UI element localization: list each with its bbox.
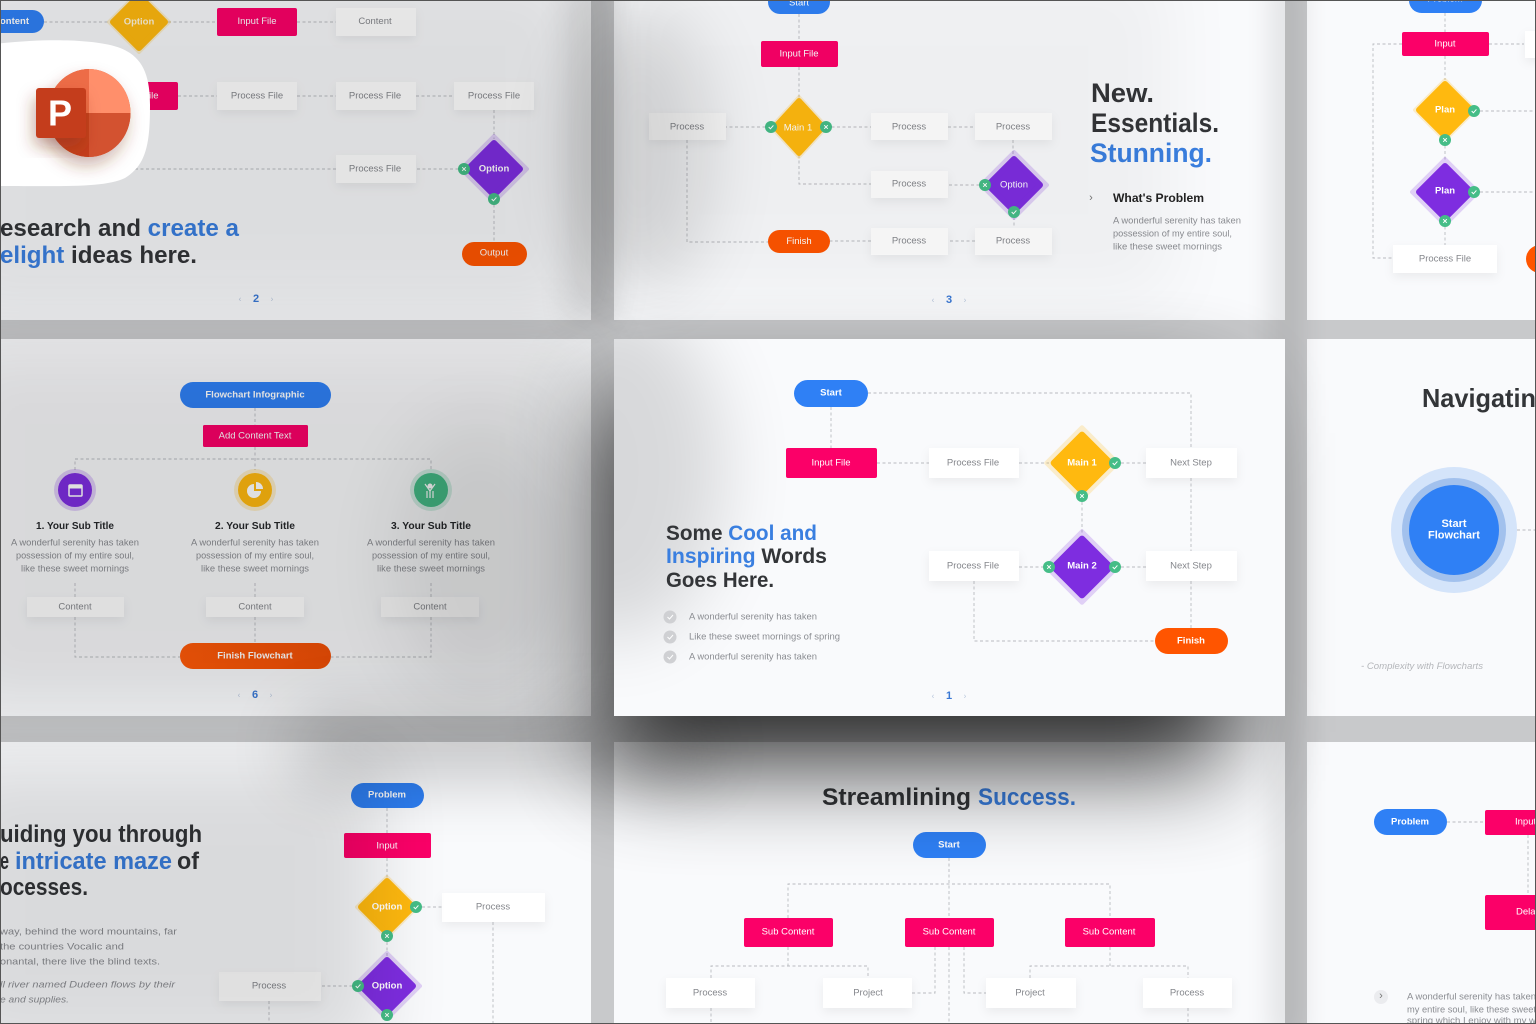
- heading: uiding you through: [0, 821, 202, 848]
- box: project 1: [823, 978, 912, 1008]
- box: sub content 2: [905, 918, 994, 947]
- heading: [666, 522, 827, 592]
- bullet 3: A wonderful serenity has taken: [689, 652, 817, 662]
- slide 6: flowchart infographic: [0, 339, 591, 716]
- box: input file: [217, 8, 297, 36]
- icon: person: [410, 469, 452, 511]
- pill: finish: Finish: [786, 236, 812, 247]
- pill: problem: Problem: [368, 790, 406, 800]
- box: input file: [786, 448, 877, 478]
- heading: New.: [1091, 78, 1154, 108]
- icon: calendar: [54, 469, 96, 511]
- pagination: 1: [946, 690, 952, 702]
- icon: pie chart: [234, 469, 276, 511]
- box: input: Input: [376, 840, 398, 852]
- diamond: plan purple: [1412, 159, 1480, 227]
- box: process e: Process: [996, 236, 1030, 246]
- pill: output: [462, 242, 527, 266]
- box: process file 2: Process File: [349, 90, 401, 102]
- pagination: ‹: [932, 692, 935, 700]
- diamond: main 1: Main 1: [1067, 458, 1097, 468]
- box: input: Input: [1515, 816, 1536, 828]
- diamond: option: Option: [124, 16, 154, 28]
- box: process file top: [929, 448, 1019, 478]
- pagination: ›: [964, 692, 967, 700]
- paragraph: onantal, there live the blind texts.: [0, 956, 160, 968]
- box: process file 2: [336, 82, 416, 110]
- subtitle: 3. Your Sub Title: [391, 520, 471, 532]
- paragraph: [1407, 992, 1536, 1024]
- pill: problem: [351, 783, 424, 808]
- pill: output: Output: [480, 248, 509, 258]
- pagination: [932, 294, 967, 306]
- heading: ocesses.: [0, 874, 88, 901]
- diamond: option yellow: Option: [372, 902, 402, 912]
- paragraph: A wonderful serenity has taken: [1407, 992, 1536, 1002]
- slide 10: problem and delay: [1307, 742, 1536, 1024]
- box: delay: [1485, 895, 1536, 930]
- paragraph: A wonderful serenity has taken: [11, 538, 139, 548]
- box: input file: Input File: [779, 48, 819, 60]
- box: process left: Process: [670, 122, 704, 132]
- paragraph: possession of my entire soul,: [1113, 228, 1232, 240]
- slide 3: new essentials: [614, 0, 1285, 320]
- paragraph: possession of my entire soul,: [196, 550, 314, 562]
- box: input: Input: [1434, 38, 1456, 50]
- diamond: main 1: Main 1: [784, 122, 812, 134]
- paragraph: like these sweet mornings: [21, 564, 129, 574]
- powerpoint badge: [0, 40, 150, 186]
- chevron icon: [1374, 990, 1388, 1004]
- diamond: main 1: [1046, 427, 1121, 502]
- diamond: purple option: [458, 136, 527, 205]
- box: process a: [871, 113, 948, 140]
- heading: [822, 784, 1076, 811]
- box: input file: Input File: [811, 458, 851, 468]
- box: content: [27, 597, 124, 617]
- diamond: main 1: [765, 97, 832, 157]
- box: process d: [871, 228, 948, 255]
- box: sub content 3: Sub Content: [1083, 926, 1136, 938]
- pagination: ‹: [239, 294, 242, 304]
- box: add content text: Add Content Text: [219, 430, 292, 442]
- box: add content text: [203, 425, 308, 447]
- box: process file: [1393, 245, 1497, 273]
- box: process left: [219, 972, 321, 1001]
- column 1: [11, 469, 139, 617]
- box: process left: Process: [252, 980, 286, 992]
- slide 7: navigating: [1307, 339, 1536, 716]
- box: content: Content: [413, 602, 447, 612]
- heading: Goes Here.: [666, 569, 774, 592]
- heading: Streamlining: [822, 784, 971, 811]
- paragraph: [0, 926, 177, 968]
- subheading: What's Problem: [1113, 193, 1204, 205]
- pagination: [239, 293, 274, 305]
- column 2: [191, 469, 319, 617]
- box: project 2: Project: [1015, 988, 1045, 998]
- box: input file: [761, 41, 838, 67]
- pagination: ›: [271, 294, 274, 304]
- heading: [0, 821, 202, 901]
- slide 8: guiding: [0, 742, 591, 1024]
- diamond: option yellow: [357, 877, 422, 942]
- pill: problem: Problem: [1391, 816, 1429, 828]
- pill: finish: Finish: [1177, 636, 1205, 646]
- slide 1: main center slide: [614, 339, 1285, 716]
- pagination: 3: [946, 294, 952, 306]
- box: content: Content: [238, 602, 272, 612]
- box: input: [344, 833, 431, 858]
- paragraph: [191, 538, 319, 574]
- box: process file 1: Process File: [231, 90, 283, 102]
- pill: finish flowchart: Finish Flowchart: [217, 650, 294, 662]
- paragraph: [11, 538, 139, 574]
- box: next step top: [1146, 448, 1237, 478]
- paragraph: way, behind the word mountains, far: [0, 926, 177, 938]
- pill: finish flowchart: [180, 643, 331, 669]
- box: process e: [975, 228, 1052, 255]
- box: content: [206, 597, 304, 617]
- paragraph: A wonderful serenity has taken: [1113, 216, 1241, 226]
- heading: Inspiring Words: [666, 545, 827, 568]
- box: input: [1402, 32, 1489, 56]
- box: process file 3: [454, 82, 534, 110]
- heading: [1090, 78, 1219, 168]
- box: next step bottom: Next Step: [1170, 560, 1212, 572]
- heading: Success.: [978, 784, 1076, 811]
- pill: start: Start: [820, 388, 843, 398]
- paragraph: my entire soul, like these sweet: [1407, 1004, 1536, 1016]
- box: process 1: Process: [693, 988, 727, 998]
- pagination: 6: [252, 689, 258, 701]
- heading: of: [177, 848, 200, 875]
- diamond: plan yellow: Plan: [1435, 104, 1455, 116]
- pagination: ›: [270, 690, 273, 700]
- box: sub content 1: [744, 918, 833, 947]
- heading: Stunning.: [1090, 138, 1212, 168]
- circle: start flowchart: Start: [1441, 518, 1467, 530]
- box: process c: [871, 171, 948, 198]
- box: process file bottom: Process File: [947, 560, 999, 572]
- box: input file cut off by badge: [100, 82, 178, 110]
- box: process right: [442, 893, 545, 922]
- box: input file: Input File: [237, 16, 277, 27]
- subtitle: 1. Your Sub Title: [36, 520, 114, 532]
- box: project 1: Project: [853, 988, 883, 998]
- italic note: [0, 980, 176, 1006]
- paragraph: A wonderful serenity has taken: [191, 538, 319, 548]
- heading: Navigatin: [1422, 383, 1536, 413]
- diamond: plan yellow: [1415, 80, 1480, 146]
- box: process b: [975, 113, 1052, 140]
- pill: start: [794, 380, 868, 407]
- box: process c: Process: [892, 178, 926, 190]
- pill: start: [913, 832, 986, 858]
- bullet 1: A wonderful serenity has taken: [689, 612, 817, 622]
- box: process 1: [666, 978, 755, 1008]
- box: process right: Process: [476, 902, 510, 912]
- box: process file 3: Process File: [468, 90, 520, 102]
- pagination: ‹: [932, 296, 935, 304]
- paragraph: [1113, 216, 1241, 252]
- paragraph: the countries Vocalic and: [0, 942, 124, 952]
- paragraph: like these sweet mornings: [1113, 242, 1222, 252]
- paragraph: like these sweet mornings: [201, 564, 309, 574]
- paragraph: possession of my entire soul,: [372, 550, 490, 562]
- pill: flowchart infographic: [180, 382, 331, 408]
- diamond: main 2: Main 2: [1067, 560, 1097, 572]
- paragraph: like these sweet mornings: [377, 564, 485, 574]
- box: project 2: [986, 978, 1076, 1008]
- box: process 2: Process: [1170, 988, 1204, 998]
- box: sub content 2: Sub Content: [923, 926, 976, 938]
- diamond: purple option: Option: [479, 164, 509, 174]
- box: process d: Process: [892, 236, 926, 246]
- pagination: [932, 690, 967, 702]
- diamond: plan purple: Plan: [1435, 186, 1455, 196]
- diamond: option: [109, 0, 169, 52]
- heading: e: [0, 848, 9, 875]
- box: process file 4: Process File: [349, 164, 401, 174]
- chevron icon: ›: [1379, 990, 1383, 1002]
- slide 4: plan flowchart: [1307, 0, 1536, 320]
- slide 2: research flowchart: [0, 0, 591, 320]
- icon: powerpoint logo: P: [48, 92, 72, 134]
- box: input file cut off by badge: Input File: [119, 90, 159, 102]
- box: process left: [649, 113, 726, 140]
- pill: start: Start: [938, 840, 961, 850]
- pill: finish: [1155, 628, 1228, 654]
- bullet 2: Like these sweet mornings of spring: [689, 632, 840, 642]
- box: content: Content: [58, 602, 92, 612]
- paragraph: possession of my entire soul,: [16, 550, 134, 562]
- italic note: e and supplies.: [0, 994, 69, 1006]
- pill: flowchart infographic: Flowchart Infographic: [205, 390, 305, 400]
- pagination: ›: [964, 296, 967, 304]
- soft grey gradient: [614, 339, 745, 655]
- pill: finish: [768, 230, 830, 253]
- circle: start flowchart: [1391, 467, 1517, 593]
- circle: start flowchart: Flowchart: [1428, 530, 1480, 542]
- box: content: [336, 8, 416, 36]
- paragraph: A wonderful serenity has taken: [367, 538, 495, 548]
- pagination: [238, 689, 273, 701]
- column 3: [367, 469, 495, 617]
- subtitle: 2. Your Sub Title: [215, 520, 295, 532]
- pill: content: ontent: [0, 16, 30, 27]
- box: content: [381, 597, 479, 617]
- box: next step top: Next Step: [1170, 458, 1212, 468]
- box: sub content 1: Sub Content: [762, 926, 815, 938]
- pill: problem: [1374, 809, 1447, 835]
- paragraph: [367, 538, 495, 574]
- diamond: option purple: [352, 953, 420, 1021]
- heading: Essentials.: [1091, 108, 1219, 138]
- box: process file bottom: [929, 551, 1019, 581]
- box: input: [1485, 810, 1536, 835]
- box: process a: Process: [892, 122, 926, 132]
- pill: content: [0, 10, 44, 33]
- heading: [0, 215, 240, 269]
- pagination: ‹: [238, 690, 241, 700]
- heading: intricate maze: [15, 848, 172, 875]
- italic note: ll river named Dudeen flows by their: [0, 980, 176, 990]
- diamond: option: Option: [1000, 180, 1028, 190]
- pagination: 2: [253, 293, 259, 305]
- box: next step bottom: [1146, 551, 1237, 581]
- box: content: Content: [358, 16, 392, 27]
- caption: - Complexity with Flowcharts: [1361, 661, 1484, 671]
- box: process file 1: [217, 82, 297, 110]
- pill: problem: [1409, 0, 1482, 13]
- slide 9: streamlining success: [614, 742, 1285, 1024]
- diamond: option: [979, 152, 1047, 218]
- box: process file top: Process File: [947, 458, 999, 468]
- heading: elight ideas here.: [0, 242, 197, 269]
- box: process 2: [1143, 978, 1232, 1008]
- icon: powerpoint logo: [36, 69, 130, 157]
- box: process file: Process File: [1419, 254, 1471, 264]
- box: sub content 3: [1065, 918, 1155, 947]
- heading: esearch and create a: [0, 215, 240, 242]
- pill: orange cut off: [1526, 245, 1536, 273]
- bullet list: [664, 610, 840, 664]
- box: process file 4: [336, 155, 416, 183]
- chevron: ›: [1089, 192, 1093, 204]
- diamond: main 2: [1043, 531, 1121, 603]
- box: cut off right: [1525, 31, 1536, 58]
- heading: Some Cool and: [666, 522, 817, 545]
- box: process b: Process: [996, 122, 1030, 132]
- pill: start: [768, 0, 830, 14]
- diamond: option purple: Option: [372, 980, 402, 992]
